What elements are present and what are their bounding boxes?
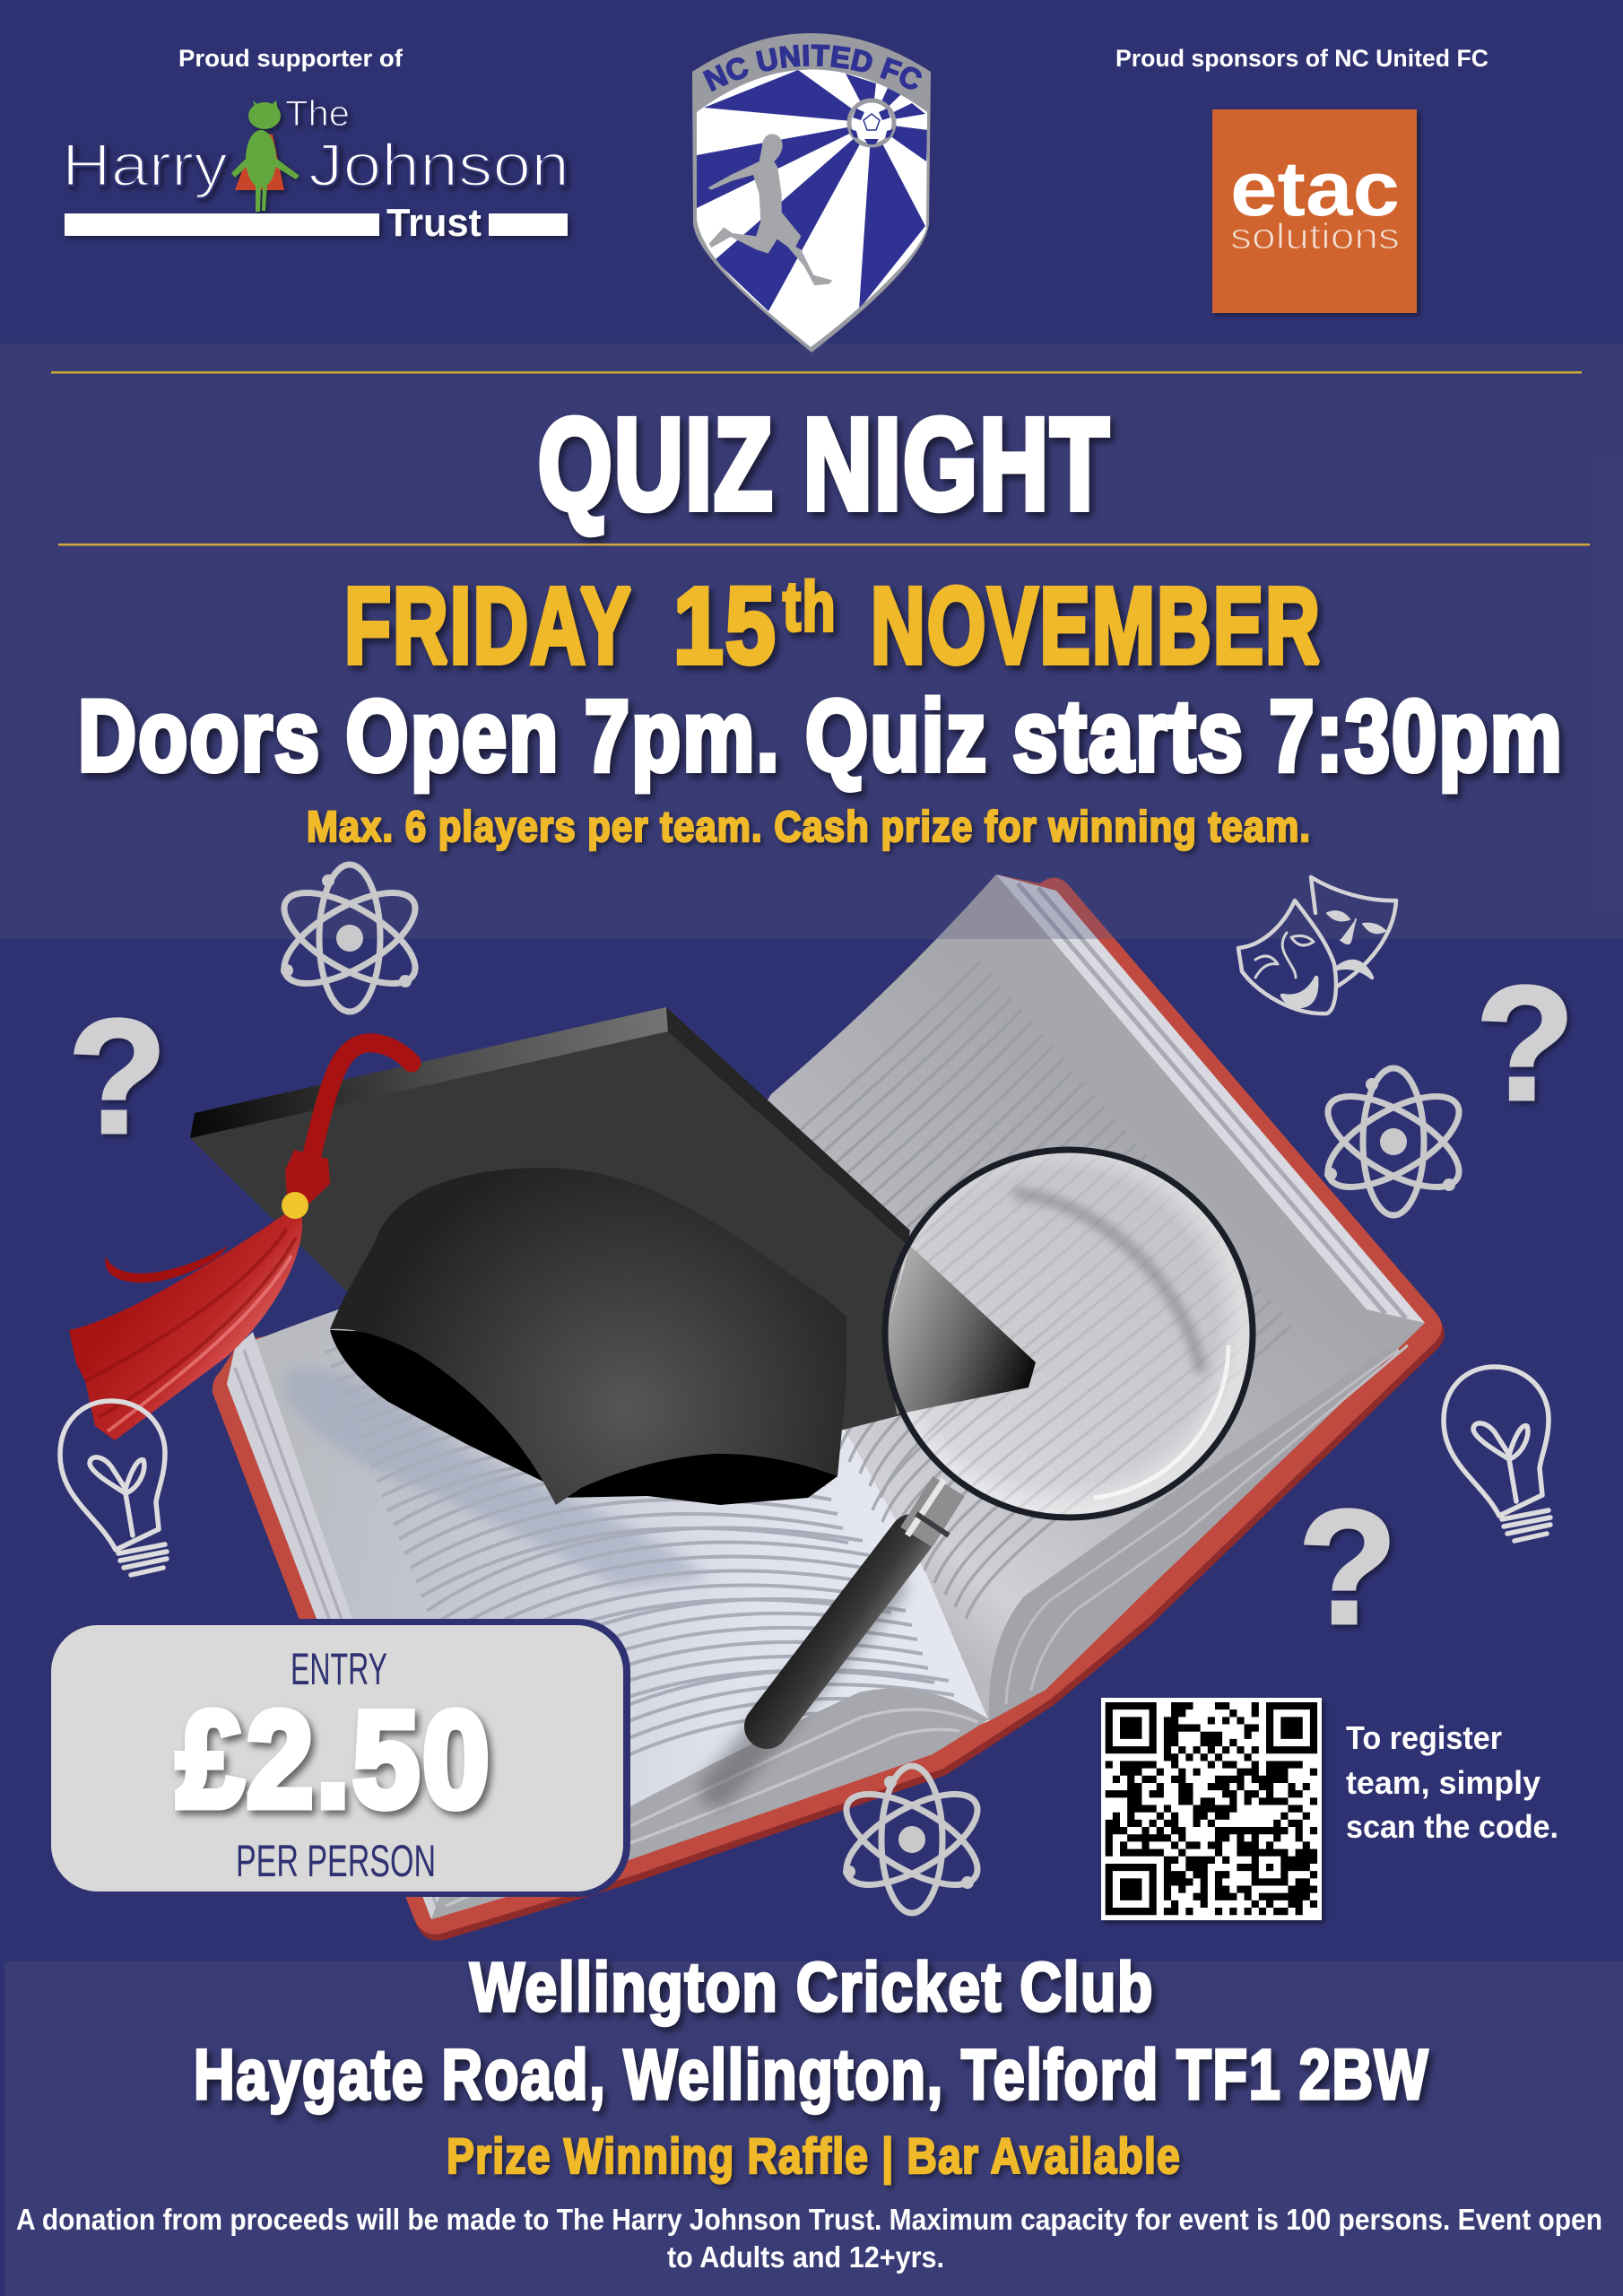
QR code — [1101, 1698, 1322, 1920]
logo: frog hero cape — [235, 132, 284, 190]
date: 15 — [673, 564, 777, 686]
date — [344, 564, 1322, 686]
right page — [681, 874, 1425, 1721]
logo text: Johnson: Johnson — [308, 132, 569, 199]
left page stack — [431, 1688, 989, 1919]
register instruction: scan the code. — [1346, 1808, 1558, 1845]
entry box — [51, 1625, 623, 1892]
donation note — [16, 2203, 1602, 2274]
shield outline — [692, 33, 931, 352]
divider line top — [51, 371, 1582, 373]
register instruction: team, simply — [1346, 1764, 1541, 1801]
icon: atom right — [1315, 1068, 1472, 1215]
icon: question mark right: ? — [1475, 952, 1575, 1135]
price: £2.50 — [177, 1683, 492, 1836]
overlay band: event details — [0, 344, 1623, 939]
board right edge — [666, 1007, 910, 1246]
icon: light bulb right — [1444, 1367, 1550, 1541]
icon: atom top left — [271, 865, 429, 1012]
icon: atom bottom — [833, 1766, 991, 1913]
left page text lines — [325, 1312, 966, 1826]
cap skull — [330, 1168, 846, 1505]
logo text: Harry: Harry — [62, 132, 229, 199]
date: FRIDAY — [344, 564, 633, 686]
right page text lines — [691, 961, 1292, 1619]
logo: NC United FC shield — [692, 33, 931, 352]
logo bars — [65, 213, 568, 236]
venue name: Wellington Cricket Club — [470, 1949, 1154, 2026]
logo: frog hero — [231, 100, 299, 212]
handle shadow — [717, 1587, 888, 1789]
icon: question mark left: ? — [67, 985, 168, 1168]
left page — [227, 1238, 989, 1919]
cap underside — [330, 1330, 838, 1505]
hat tip through lens — [885, 1246, 1036, 1414]
logo text: The: The — [285, 94, 350, 134]
tassel strand — [105, 1246, 229, 1283]
shield ball — [849, 100, 894, 145]
lens — [887, 1152, 1251, 1516]
book cover — [213, 874, 1442, 1935]
team rules: Max. 6 players per team. Cash prize for winning team. — [307, 804, 1311, 851]
etac word: etac — [1230, 146, 1400, 232]
shield runner — [707, 134, 832, 285]
shield text — [701, 65, 925, 97]
heading: proud supporter: Proud supporter of — [178, 45, 404, 72]
open book — [213, 874, 1445, 1941]
logo: NC United FC shield: NC UNITED FC — [703, 44, 922, 91]
register instruction — [1346, 1719, 1558, 1845]
date: NOVEMBER — [871, 564, 1322, 686]
tassel bead — [282, 1192, 308, 1219]
lens shading — [1013, 1193, 1202, 1372]
lens ring — [885, 1150, 1253, 1518]
solutions word: solutions — [1230, 217, 1400, 257]
donation note: to Adults and 12+yrs. — [667, 2240, 944, 2274]
tassel fringe — [69, 1211, 302, 1440]
etac square — [1212, 109, 1417, 313]
icon: theatre masks — [1238, 877, 1396, 1013]
register instruction: To register — [1346, 1719, 1502, 1756]
title: QUIZ NIGHT — [538, 392, 1111, 536]
icon: light bulb left — [60, 1401, 167, 1575]
board top edge — [190, 1007, 668, 1138]
heading: proud sponsors: Proud sponsors of NC United FC — [1115, 45, 1488, 72]
logo: etac solutions — [1212, 109, 1417, 313]
shield rays — [690, 63, 933, 354]
right page stack — [989, 1323, 1425, 1721]
panel: entry price — [45, 1619, 630, 1897]
graduation cap — [69, 1007, 910, 1505]
metal collar — [916, 1486, 949, 1537]
page shading — [284, 1369, 708, 1587]
left fore-edge — [227, 1332, 450, 1919]
mortarboard — [190, 1031, 907, 1431]
per person label: PER PERSON — [236, 1836, 436, 1886]
cover dark edge — [215, 881, 1445, 1941]
handle — [767, 1536, 912, 1726]
right fore-edge — [996, 874, 1425, 1323]
logo: Harry Johnson Trust — [62, 94, 569, 245]
logo text: Trust: Trust — [386, 201, 482, 245]
raffle and bar: Prize Winning Raffle | Bar Available — [447, 2127, 1181, 2185]
QR background — [1101, 1698, 1322, 1920]
date: th — [783, 567, 837, 646]
tassel knot — [285, 1150, 330, 1204]
tassel cord — [310, 1043, 412, 1161]
bottom band — [4, 1961, 1623, 2296]
icon: question mark lower: ? — [1298, 1475, 1398, 1658]
QR modules — [1106, 1706, 1317, 1911]
divider line bottom — [58, 544, 1590, 545]
entry box border — [45, 1619, 630, 1897]
magnifying glass — [717, 1150, 1253, 1789]
entry label: ENTRY — [291, 1644, 387, 1694]
